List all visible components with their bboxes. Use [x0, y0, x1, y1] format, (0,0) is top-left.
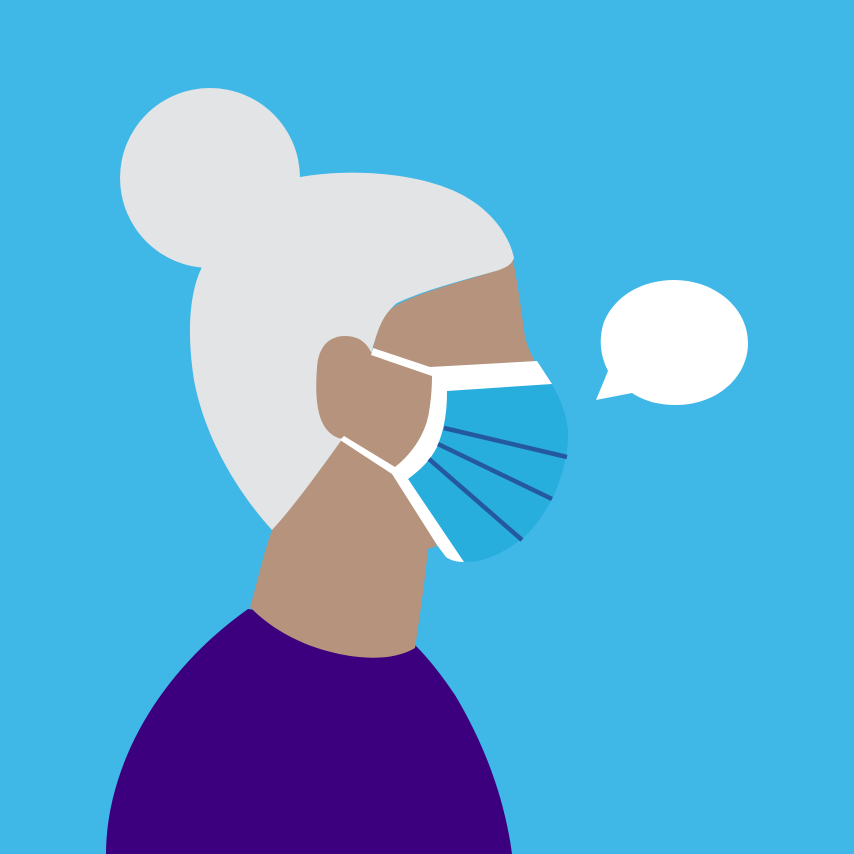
mask white trim	[340, 348, 552, 562]
face	[372, 260, 536, 372]
mask fabric	[408, 383, 568, 562]
hair	[120, 88, 514, 530]
speech bubble	[596, 280, 748, 405]
hair main	[190, 173, 514, 530]
neck	[250, 438, 437, 658]
sweater	[106, 609, 512, 854]
face mask	[340, 348, 568, 562]
mask pleats	[429, 428, 567, 540]
ear	[316, 336, 436, 468]
hair bun	[120, 88, 300, 268]
